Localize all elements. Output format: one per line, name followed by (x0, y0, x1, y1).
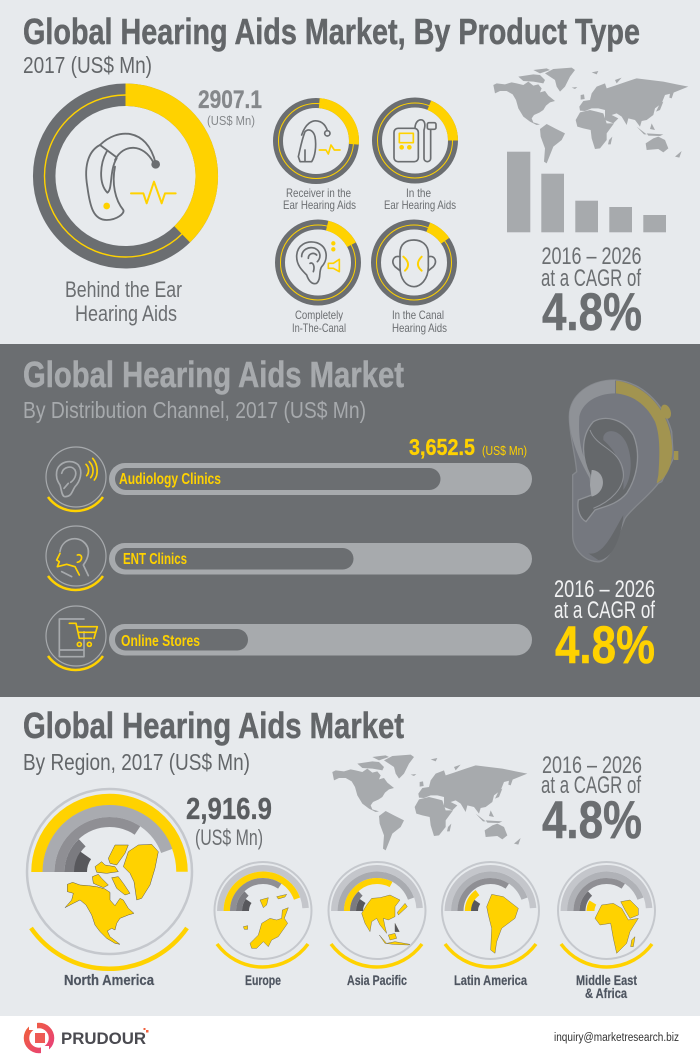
bar: ENT clinics (109, 543, 532, 574)
world map: region (332, 755, 527, 850)
map: europe (243, 894, 288, 948)
callout: CAGR product type (541, 243, 642, 342)
region: asia pacific (328, 862, 426, 967)
bar chart: product type (507, 152, 666, 232)
subtitle: region: By Region, 2017 (US$ Mn) (23, 749, 250, 775)
label: completely in the canal: Completely (295, 308, 343, 322)
label: in the ear: Ear Hearing Aids (384, 198, 456, 212)
subtitle: distribution channel: By Distribution Channel, 2017 (US$ Mn) (23, 397, 366, 423)
icon: ENT head (46, 526, 106, 590)
label: middle east and africa: Middle East (576, 973, 637, 988)
title: distribution channel: Global Hearing Aids Market (23, 354, 404, 395)
logo: prudour: PRUDOUR (61, 1030, 146, 1048)
label: receiver in the ear: Receiver in the (286, 186, 351, 200)
world map: product type (493, 68, 688, 163)
label: behind the ear (65, 277, 182, 326)
icon: ear and speaker (297, 242, 339, 284)
contact email: inquiry@marketresearch.biz (554, 1032, 679, 1044)
callout: CAGR region: at a CAGR of (541, 772, 641, 799)
icon: pocket device (394, 120, 436, 162)
region: middle east and africa (558, 862, 655, 967)
panel: product type (23, 11, 688, 342)
callout: CAGR product type: at a CAGR of (541, 265, 641, 292)
label: receiver in the ear: Ear Hearing Aids (283, 198, 356, 212)
value: 2,916.9: 2,916.9 (186, 791, 272, 826)
donut: completely in the canal (280, 224, 356, 300)
label: latin america: Latin America (454, 973, 527, 988)
map: north america (65, 844, 158, 944)
label: behind the ear: Hearing Aids (75, 301, 177, 326)
label: completely in the canal (292, 308, 346, 335)
logo: prudour (26, 1022, 148, 1054)
callout: CAGR distribution channel: 2016 – 2026 (554, 576, 655, 603)
callout: CAGR distribution channel (554, 576, 655, 675)
label: in the canal: In the Canal (392, 308, 444, 322)
panel: region (23, 705, 655, 1001)
donut: in the canal (376, 224, 452, 300)
label: europe: Europe (245, 973, 281, 988)
bar: online stores (109, 624, 532, 656)
label: completely in the canal: In-The-Canal (292, 321, 346, 335)
callout: CAGR region: 2016 – 2026 (542, 752, 642, 779)
unit: US$ Mn: (US$ Mn) (195, 825, 263, 850)
panel: distribution channel (23, 354, 678, 675)
bar: online stores: Online Stores (121, 633, 200, 650)
unit: US$ Mn: (US$ Mn) (207, 113, 255, 128)
icon: receiver device (298, 121, 340, 162)
icon: head (393, 240, 435, 287)
label: middle east and africa (576, 973, 637, 1001)
label: in the canal: Hearing Aids (392, 321, 447, 335)
label: asia pacific: Asia Pacific (347, 973, 407, 988)
donut: in the ear (377, 102, 453, 178)
callout: CAGR region (541, 752, 642, 850)
map: south america (487, 894, 518, 953)
value: 3,652.5: 3,652.5 (409, 434, 475, 460)
label: receiver in the ear (283, 186, 356, 212)
bar: audiology clinics: Audiology Clinics (119, 471, 221, 488)
icon: audiology ear (46, 447, 106, 511)
region: north america (27, 789, 192, 969)
bar: audiology clinics (109, 463, 532, 495)
unit: US$ Mn: (US$ Mn) (482, 443, 527, 458)
label: in the ear: In the (406, 186, 431, 200)
value: 2907.1: 2907.1 (198, 86, 262, 114)
callout: CAGR distribution channel: at a CAGR of (554, 597, 655, 624)
label: in the ear (384, 186, 456, 212)
label: north america: North America (64, 972, 155, 989)
illustration: ear with hearing aid (569, 380, 678, 562)
callout: CAGR product type: 4.8% (542, 283, 642, 342)
callout: CAGR distribution channel: 4.8% (555, 616, 655, 675)
donut: behind the ear (44, 95, 207, 257)
donut: receiver in the ear (278, 103, 354, 179)
region: latin america (442, 862, 539, 967)
footer (26, 1022, 679, 1054)
bar: ENT clinics: ENT Clinics (123, 551, 187, 568)
icon: online store cart (46, 606, 106, 670)
subtitle: product type: 2017 (US$ Mn) (23, 52, 152, 78)
map: africa and middle east (595, 900, 638, 953)
icon: behind the ear device (86, 134, 176, 220)
region: europe (214, 862, 312, 967)
label: behind the ear: Behind the Ear (65, 277, 182, 302)
callout: CAGR product type: 2016 – 2026 (542, 243, 642, 270)
label: middle east and africa: & Africa (585, 986, 627, 1001)
title: region: Global Hearing Aids Market (23, 705, 404, 746)
map: asia pacific (362, 895, 410, 945)
callout: CAGR region: 4.8% (542, 791, 642, 850)
label: in the canal (392, 308, 447, 335)
